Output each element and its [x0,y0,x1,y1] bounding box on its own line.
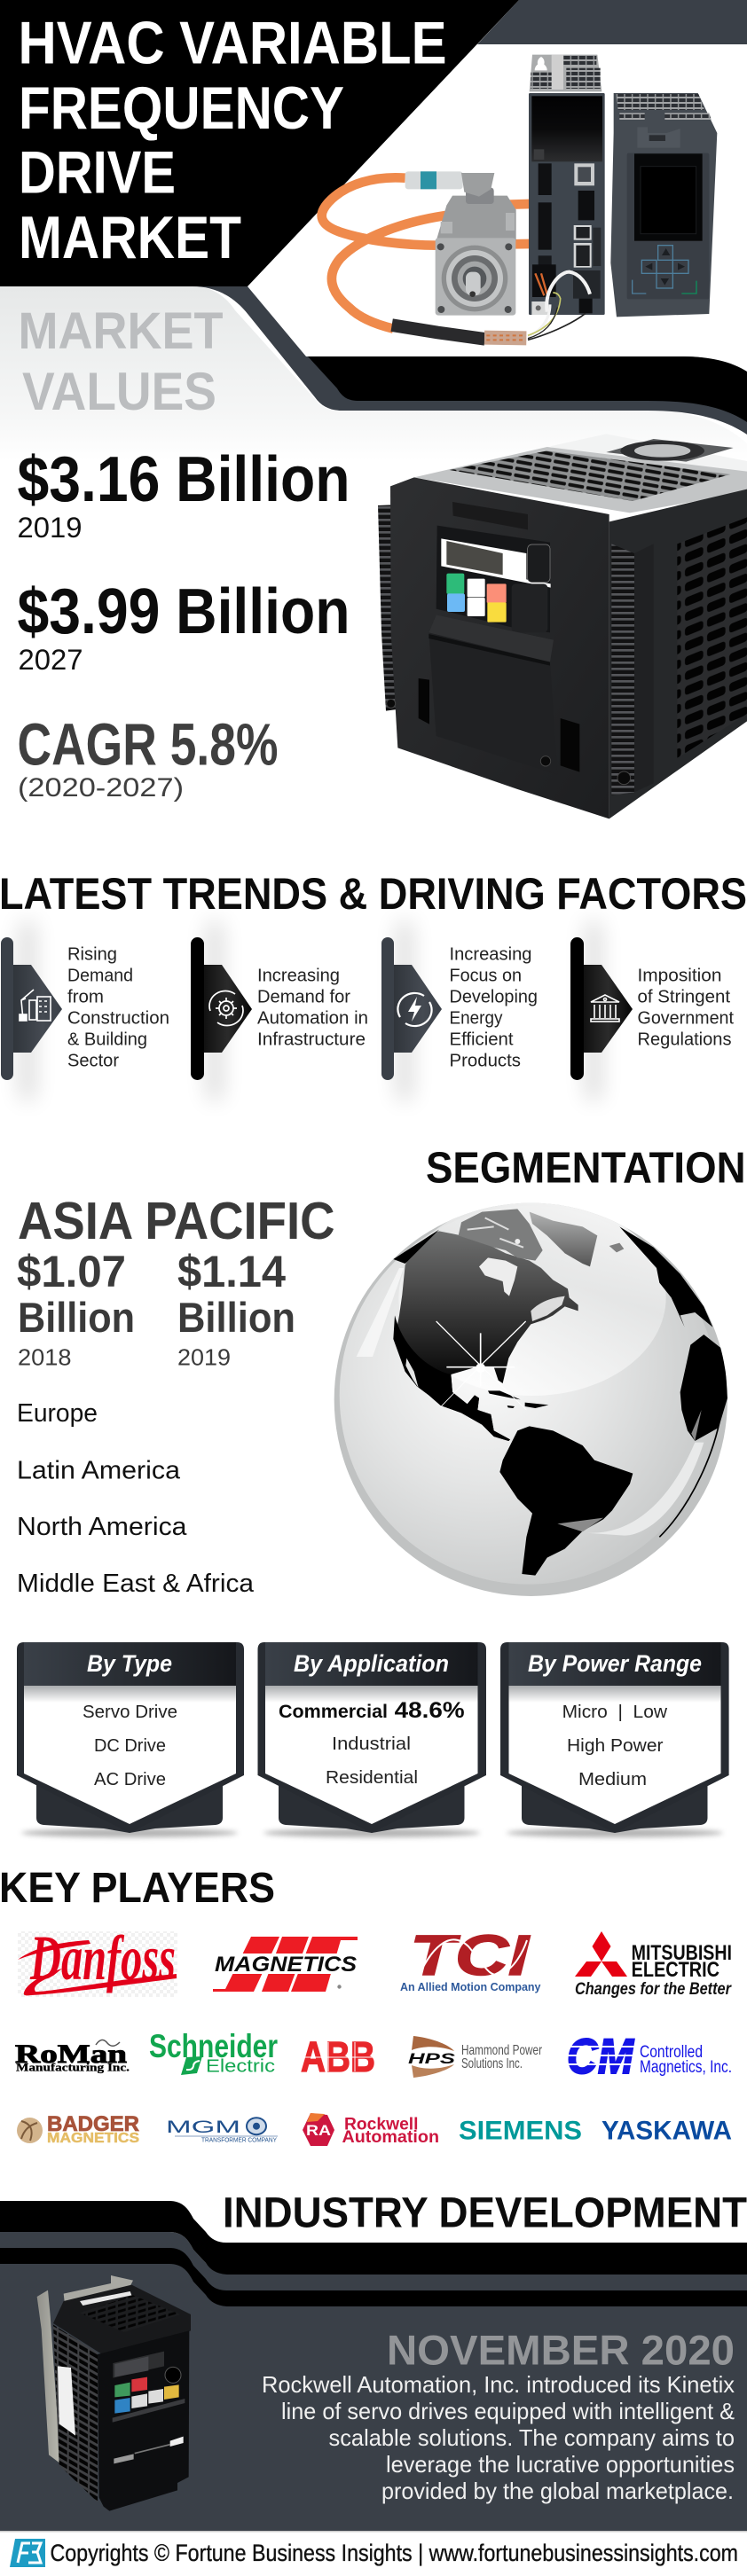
value 2018 [17,1247,135,1370]
header shade [265,1686,477,1703]
region list: Europe [17,1399,98,1428]
globe [334,1200,727,1596]
logo: Badger Magnetics: BADGER [47,2112,139,2136]
product image: large frequency drive [378,434,747,818]
d-pad keys [641,246,688,288]
cable sleeve [392,325,485,339]
drive unit one [529,55,605,315]
caribbean islands [488,1390,548,1408]
description: leverage the lucrative opportunities [386,2453,735,2478]
description: line of servo drives equipped with intelligent & [281,2400,735,2424]
badge header [265,1642,477,1686]
list: Residential [326,1767,418,1788]
text: Products [449,1051,521,1071]
badge title: By Type [87,1650,172,1677]
text [257,966,368,1050]
text: Imposition [637,966,722,986]
text: Demand [67,966,133,986]
title: DRIVE [19,139,176,207]
date: NOVEMBER 2020 [387,2328,735,2375]
logo: Rockwell Automation: Rockwell [344,2116,419,2134]
value 2019: $3.16 Billion [18,444,350,515]
fan [606,439,734,462]
text: Regulations [637,1030,731,1050]
badge body [509,1686,720,1824]
driver 3: energy efficiency [381,937,538,1080]
tab shadows [20,922,602,1100]
patagonia shade [557,1518,603,1531]
hudson bay [479,1257,517,1296]
top white cover [550,434,747,485]
south america [499,1426,633,1576]
logo: TCI [400,1923,541,1993]
badge body [24,1686,236,1824]
orange cables [322,177,530,329]
logo: Schneider Electric [149,2028,278,2077]
text: Automation in [257,1008,368,1029]
heading: key players: KEY PLAYERS [0,1865,275,1912]
list: DC Drive [94,1735,166,1756]
logo: Hammond Power Solutions: Solutions Inc. [461,2056,523,2071]
black band two [0,2248,747,2306]
text: Energy [449,1008,503,1029]
card shadow [507,1828,723,1837]
screws [387,699,631,785]
logo: Danfoss [18,1922,177,1997]
list [279,1698,465,1788]
title: HVAC VARIABLE [18,10,447,77]
text: Increasing [257,966,340,986]
title: MARKET [19,204,241,271]
market values heading [18,302,224,421]
badge title: By Power Range [528,1650,702,1677]
list [83,1702,177,1789]
description: scalable solutions. The company aims to [328,2426,735,2451]
back ribbon [279,1782,465,1833]
value 2018: Billion [18,1295,135,1342]
card: by type [17,1642,244,1837]
front face [390,477,609,818]
small drive image [37,2275,191,2511]
value 2019 [177,1247,295,1370]
market value figures [18,444,350,803]
black band one [0,2201,747,2275]
list: Commercial [279,1702,388,1722]
text: Government [637,1008,734,1029]
logo: TCI: TCI [410,1923,531,1987]
logo: RoMan: RoMan [15,2040,127,2069]
list: Micro | Low [562,1702,667,1722]
greenland [530,1212,597,1266]
value 2019: 2019 [177,1343,231,1370]
text: of Stringent [637,987,730,1007]
cutouts [419,678,429,724]
logo: Badger Magnetics: MAGNETICS [47,2131,139,2146]
europe [619,1226,712,1327]
baja gulf [405,1358,419,1388]
side face [609,489,747,818]
text: Efficient [449,1030,514,1050]
text [449,944,538,1071]
control panel [436,526,551,632]
badge header [24,1642,236,1686]
list: High Power [567,1735,664,1756]
text: Developing [449,987,538,1007]
loose wires [528,272,590,340]
region figures [17,1192,335,1370]
title: FREQUENCY [19,74,344,142]
description: Rockwell Automation, Inc. introduced its Kinetix [262,2373,735,2398]
logo: Rockwell Automation: RA [306,2122,331,2139]
market values heading: MARKET [18,302,224,360]
cable connector [405,171,494,197]
tab [570,937,633,1080]
header shade [24,1686,236,1703]
logo: Danfoss: Danfoss [29,1922,176,1993]
text: & Building [67,1030,147,1050]
badge frame [257,1642,486,1833]
black swoosh band [308,356,747,422]
logo: Controlled Magnetics: Controlled [640,2043,703,2062]
tab [1,937,62,1080]
dark swoosh band [193,286,747,435]
text: Rising [67,944,117,965]
logo: ABB: ABB [301,2034,375,2081]
icon: government building [591,995,619,1022]
servo motor [436,188,516,316]
front flap [429,615,557,774]
value 2018: 2018 [18,1343,71,1370]
north america [395,1231,578,1441]
region list [17,1399,255,1598]
back ribbon [36,1782,223,1833]
list: 48.6% [395,1698,465,1723]
badge header [509,1642,720,1686]
product image: servo drive system [322,55,717,340]
tab [381,937,442,1080]
drive unit two [610,93,717,317]
market values heading: VALUES [22,362,216,421]
value 2019: Billion [177,1295,295,1342]
card: by application [257,1642,486,1837]
logo: Magnetics [211,1937,362,1992]
iceland [609,1243,624,1252]
logo: Hammond Power Solutions: HPS [408,2050,456,2067]
value 2027: $3.99 Billion [18,576,350,647]
logo: Hammond Power Solutions: Hammond Power [461,2043,542,2058]
logo: Schneider Electric: Schneider [149,2028,278,2064]
logo: Rockwell Automation: Automation [342,2128,439,2147]
logo: Rockwell Automation [303,2113,439,2147]
logo: Magnetics: MAGNETICS [215,1953,357,1977]
tab [191,937,252,1080]
logo: TCI: An Allied Motion Company [400,1981,541,1993]
card shadow [263,1828,480,1837]
logo: Schneider Electric: Electric [206,2057,275,2077]
text: from [67,987,104,1007]
card shadow [21,1828,238,1837]
logo: Hammond Power Solutions [408,2036,542,2078]
market values light panel [0,286,747,461]
logo: Mitsubishi Electric: ELECTRIC [632,1958,719,1982]
badge frame [17,1642,244,1833]
side vents [677,517,747,758]
logo: Siemens: SIEMENS [459,2117,582,2146]
footer [0,2531,747,2567]
upper highlight cap [398,1200,666,1396]
driver 4: regulations [570,937,734,1080]
text: Increasing [449,944,532,965]
side ridges [611,544,634,795]
icon: company logo [10,2539,45,2567]
dark background [0,2232,747,2531]
driver 1: construction [1,937,169,1080]
list: Servo Drive [83,1702,177,1722]
region name: ASIA PACIFIC [18,1192,335,1250]
badge frame [500,1642,729,1833]
header shade [509,1686,720,1703]
list: Medium [578,1769,647,1789]
africa [680,1335,727,1441]
title [18,10,447,271]
text: Focus on [449,966,522,986]
text: Infrastructure [257,1030,366,1050]
text: Construction [67,1008,169,1029]
logo: MGM Transformer: MGM [166,2118,240,2137]
cable braid [484,317,526,359]
logo: Controlled Magnetics [564,2028,732,2084]
sparkle [436,1321,526,1410]
icon: building and crane [20,990,51,1021]
header banner [0,0,747,461]
text: Sector [67,1051,119,1071]
logo: MGM Transformer [166,2118,278,2144]
region list: Middle East & Africa [17,1570,255,1598]
left gloss [357,1268,404,1357]
logo: RoMan [15,2040,130,2074]
list [562,1702,667,1789]
black title block [0,0,519,286]
description [262,2373,735,2504]
east canada inlet [531,1296,565,1321]
logo: Yaskawa: YASKAWA [602,2117,732,2146]
badge title: By Application [294,1650,449,1677]
logo: Badger Magnetics [17,2112,139,2146]
icon: gear with arrows [209,990,243,1026]
top right dark bar [477,0,747,44]
driver 2: automation [191,937,368,1080]
industry development section [0,2190,747,2531]
badge body [265,1686,477,1824]
logo: RoMan: Manufacturing Inc. [16,2061,130,2074]
text [637,966,734,1050]
rim line [659,1410,721,1537]
CAGR period: (2020-2027) [18,773,184,803]
arctic islands [459,1209,543,1261]
list: AC Drive [94,1769,166,1789]
card: by power range [500,1642,729,1837]
icon: bolt with arrows [397,993,432,1026]
left ridges [378,505,397,711]
asia corner [393,1230,439,1264]
text: Demand for [257,987,350,1007]
top grey panel [414,447,747,513]
value 2019: $1.14 [177,1247,286,1296]
year 2027: 2027 [18,644,83,676]
text [67,944,169,1071]
logo: Mitsubishi Electric [575,1931,732,1999]
description: provided by the global marketplace. [381,2479,734,2504]
logo: Controlled Magnetics: CM [567,2028,634,2084]
mexico black [393,1315,510,1441]
year 2019: 2019 [18,512,82,544]
lower right gloss [583,1443,704,1536]
back ribbon [522,1782,708,1833]
CAGR: CAGR 5.8% [18,712,279,779]
top vents [450,450,730,501]
region list: North America [17,1513,187,1541]
logo: MGM Transformer: TRANSFORMER COMPANY [201,2138,277,2144]
value 2018: $1.07 [17,1247,126,1296]
list: Industrial [332,1734,411,1754]
region list: Latin America [17,1456,181,1484]
